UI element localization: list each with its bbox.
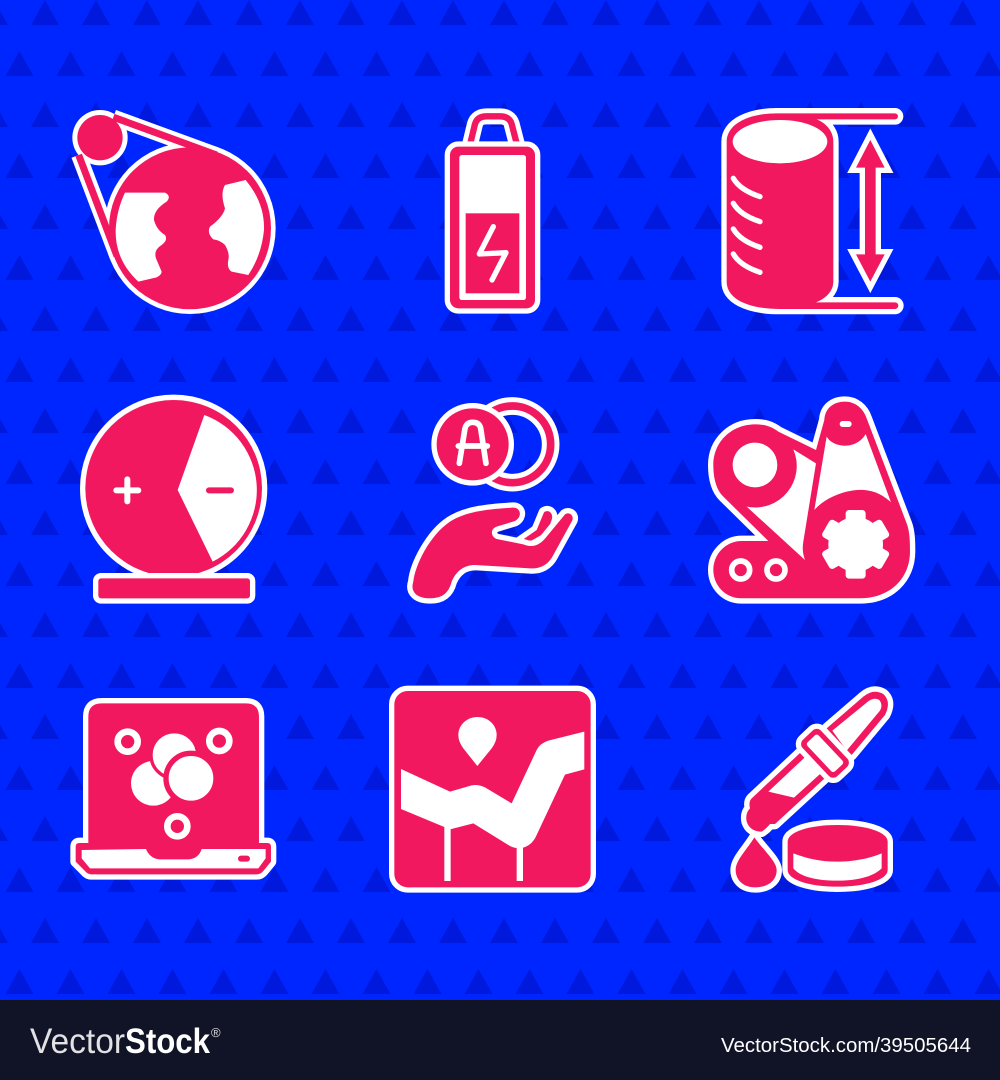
icon: battery with lightning: [450, 116, 535, 308]
icon: dropper with drop and dish: [736, 692, 888, 887]
footer bar: ®: [211, 1025, 221, 1040]
icon: timing belt with gear: [713, 402, 910, 598]
footer bar: Vector: [30, 1022, 125, 1061]
icon: globe with orbit belt: [72, 110, 276, 314]
icon: map with pin and route: [394, 691, 591, 887]
icon: charged sphere on base: [85, 400, 262, 598]
footer bar: [0, 1000, 1000, 1080]
icon: laptop with molecule: [76, 703, 271, 874]
footer bar: Stock: [125, 1022, 210, 1061]
footer bar: VectorStock.com/39505644: [721, 1035, 971, 1057]
icon: cylinder with height arrow: [727, 113, 898, 309]
icon: coins above open hand: [412, 406, 573, 598]
